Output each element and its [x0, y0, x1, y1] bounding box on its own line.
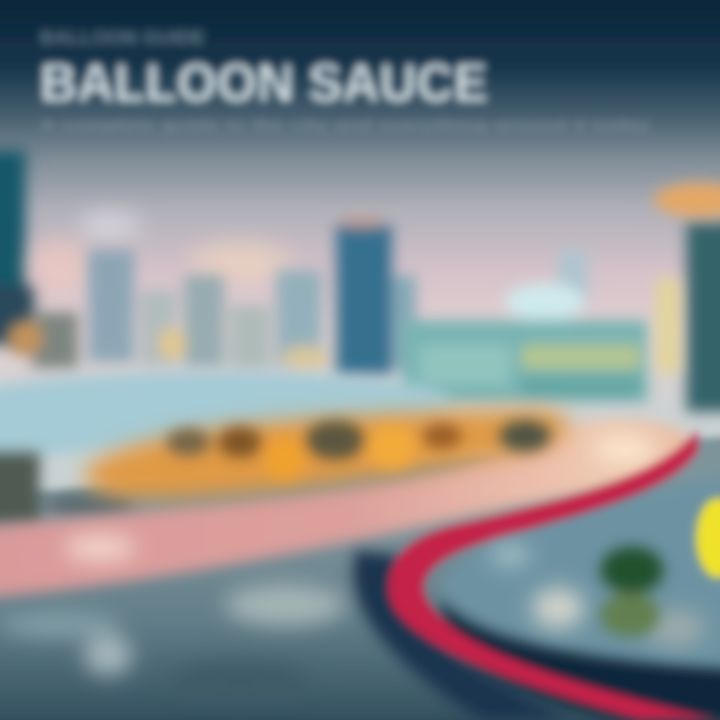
bottom right basin	[440, 465, 720, 680]
dark basin rim	[440, 600, 720, 720]
right tower with orange disc	[654, 183, 720, 412]
terrace windows	[166, 420, 551, 480]
orange terrace band	[84, 410, 569, 498]
main title: BALLOON SAUCE	[40, 53, 488, 113]
basin pale patches	[490, 545, 705, 646]
dark navy track edge	[353, 550, 570, 720]
skyline: dome and low teal complex	[402, 250, 648, 402]
skyline: distant buildings	[30, 211, 290, 291]
lower left dark cluster	[0, 452, 135, 524]
road highlights	[64, 436, 655, 561]
subtitle: A complete guide to the city and everything around it today	[40, 117, 651, 134]
red curved track	[388, 430, 720, 720]
skyline: central blue tower	[336, 215, 416, 375]
pink sweeping road	[0, 419, 693, 602]
ground base	[0, 430, 720, 720]
lower left reflections	[0, 585, 345, 698]
icon: green plant	[600, 546, 664, 637]
left teal tower	[0, 150, 35, 345]
title block	[40, 28, 651, 134]
pale blue platform	[0, 371, 452, 465]
icon: yellow disc	[696, 498, 720, 578]
small overline: BALLOON GUIDE	[40, 28, 205, 48]
